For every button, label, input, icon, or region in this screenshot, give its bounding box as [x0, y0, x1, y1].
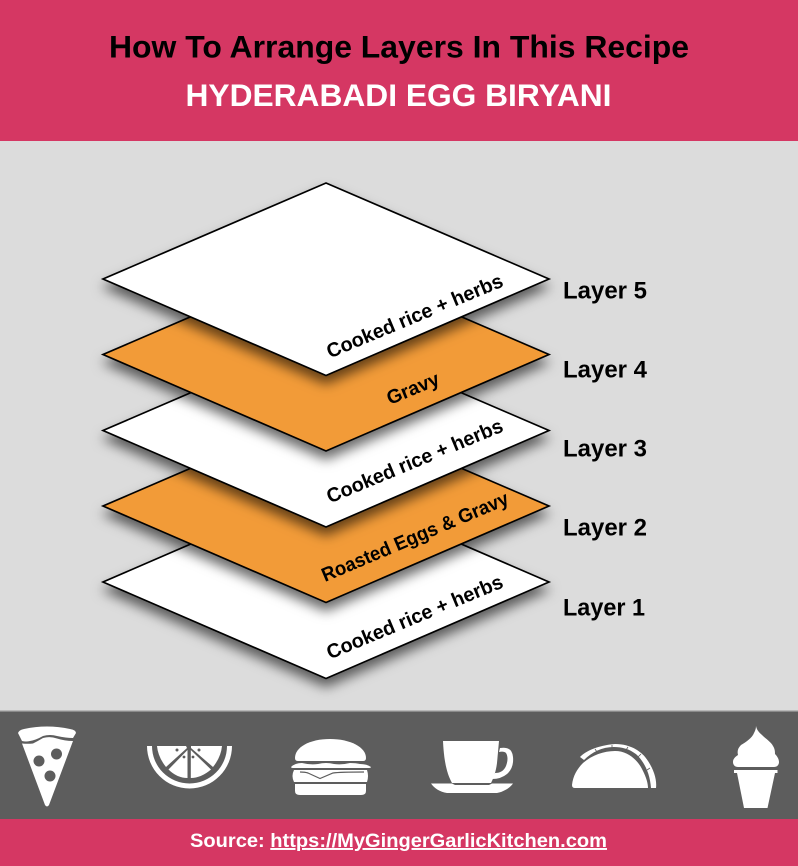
layer 3 sheet: [103, 334, 549, 527]
layer 2 sheet: Roasted Eggs & Gravy: [318, 488, 512, 587]
layer stack: [103, 183, 549, 678]
icon: coffee cup on saucer: [431, 741, 513, 793]
icon strip: [0, 710, 798, 819]
layer labels: Layer 2: [563, 514, 647, 542]
layer labels: Layer 5: [563, 278, 647, 304]
title: How To Arrange Layers In This Recipe: [109, 28, 689, 64]
icon: citrus slice: [147, 746, 232, 789]
layer labels: Layer 1: [563, 594, 645, 622]
footer banner: [0, 819, 798, 866]
icon: burger: [291, 739, 371, 795]
layer 4 sheet: [103, 258, 549, 451]
layer 5 sheet: [103, 183, 549, 376]
layer labels: Layer 3: [563, 436, 647, 462]
source line: Source: https://MyGingerGarlicKitchen.com: [190, 830, 607, 852]
layer 4 sheet: Gravy: [383, 368, 443, 410]
layer labels: [563, 278, 648, 622]
header banner: [0, 0, 798, 141]
layer labels: Layer 4: [563, 356, 648, 384]
icon: pizza slice: [18, 726, 76, 806]
layer 3 sheet: Cooked rice + herbs: [323, 415, 506, 508]
layer 2 sheet: [103, 410, 549, 602]
subtitle: HYDERABADI EGG BIRYANI: [186, 77, 612, 113]
icon: soft serve cone: [733, 726, 779, 808]
icon: taco: [572, 744, 656, 788]
layer 1 sheet: Cooked rice + herbs: [323, 571, 506, 664]
layer 5 sheet: Cooked rice + herbs: [323, 270, 506, 363]
layer 1 sheet: [103, 486, 549, 678]
